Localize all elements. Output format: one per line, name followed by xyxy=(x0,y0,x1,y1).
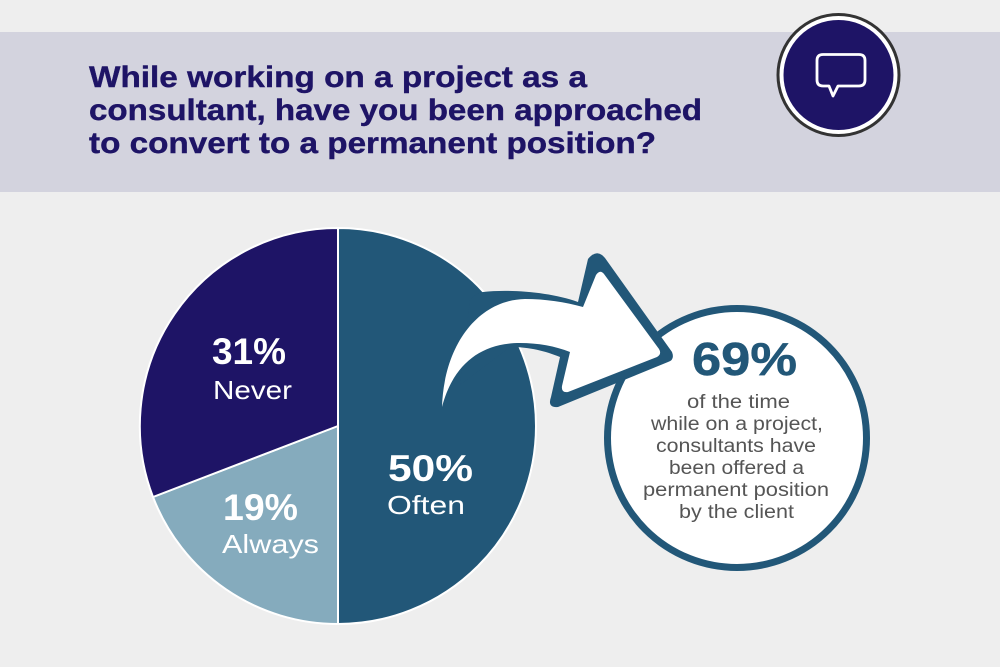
callout text: of the time xyxy=(687,392,790,413)
pie slice: often 50% xyxy=(338,228,536,624)
pie slice: always 19% xyxy=(153,426,338,624)
callout text: been offered a xyxy=(669,458,804,479)
callout text: permanent position xyxy=(643,480,829,501)
callout text: by the client xyxy=(679,502,795,523)
pie label: never: Never xyxy=(213,375,292,405)
title xyxy=(89,61,702,160)
pie label: always: Always xyxy=(222,529,319,559)
callout circle xyxy=(608,308,866,568)
pie label: always: 19% xyxy=(223,487,298,528)
pie label: often xyxy=(387,448,473,520)
title: consultant, have you been approached xyxy=(89,94,702,127)
pie chart xyxy=(140,228,536,624)
arrow xyxy=(442,253,673,407)
callout text: consultants have xyxy=(656,436,816,457)
pie label: always xyxy=(222,487,319,559)
pie slice: never 31% xyxy=(140,228,338,497)
pie label: never: 31% xyxy=(212,331,286,372)
callout text: while on a project, xyxy=(650,414,823,435)
title: While working on a project as a xyxy=(89,61,588,94)
header band xyxy=(0,32,1000,192)
pie label: often: Often xyxy=(387,490,465,520)
icon: speech bubble badge xyxy=(778,14,899,136)
callout text xyxy=(643,392,829,523)
pie label: often: 50% xyxy=(388,448,473,489)
title: to convert to a permanent position? xyxy=(89,127,656,160)
pie label: never xyxy=(212,331,292,405)
callout number: 69% xyxy=(692,333,797,385)
